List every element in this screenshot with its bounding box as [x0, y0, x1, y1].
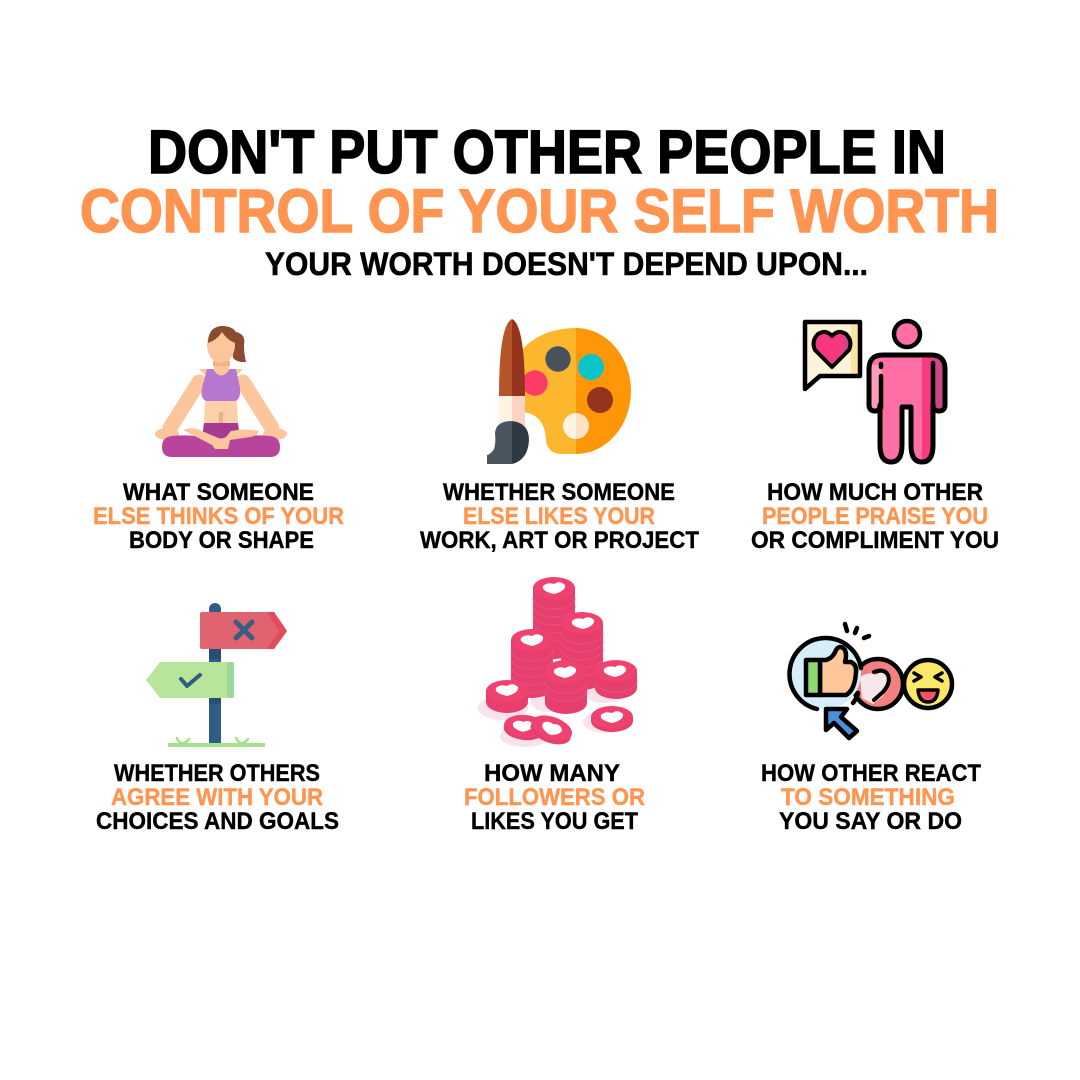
title: DON'T PUT OTHER PEOPLE IN: [148, 118, 946, 186]
title: [80, 118, 999, 245]
label: work, art or project: WHETHER SOMEONE: [443, 479, 675, 506]
label: praise or compliment: [751, 479, 999, 554]
label: body or shape: ELSE THINKS OF YOUR: [93, 503, 344, 530]
label: how others react: TO SOMETHING: [781, 784, 955, 811]
label: choices and goals: WHETHER OTHERS: [114, 760, 320, 787]
label: followers or likes: FOLLOWERS OR: [464, 784, 645, 811]
label: followers or likes: LIKES YOU GET: [471, 808, 638, 835]
label: choices and goals: CHOICES AND GOALS: [96, 808, 339, 835]
label: body or shape: BODY OR SHAPE: [129, 527, 314, 554]
label: followers or likes: [464, 760, 645, 835]
label: work, art or project: ELSE LIKES YOUR: [463, 503, 655, 530]
label: work, art or project: WORK, ART OR PROJECT: [420, 527, 699, 554]
icon: woman meditating: [155, 326, 287, 457]
label: how others react: YOU SAY OR DO: [779, 808, 962, 835]
icon: person with heart speech bubble: [805, 321, 955, 470]
label: how others react: [761, 760, 981, 835]
icon: signpost with cross and tick: [146, 603, 287, 747]
label: choices and goals: AGREE WITH YOUR: [111, 784, 323, 811]
label: work, art or project: [420, 479, 699, 554]
label: followers or likes: HOW MANY: [484, 760, 620, 787]
icon: reactions with thumbs up, heart and smiley: [789, 624, 952, 738]
icon: stacks of heart coins: [478, 577, 637, 749]
label: how others react: HOW OTHER REACT: [761, 760, 981, 787]
label: praise or compliment: HOW MUCH OTHER: [767, 479, 983, 506]
subtitle: YOUR WORTH DOESN'T DEPEND UPON...: [265, 246, 868, 282]
label: body or shape: WHAT SOMEONE: [123, 479, 314, 506]
label: body or shape: [93, 479, 344, 554]
label: praise or compliment: PEOPLE PRAISE YOU: [762, 503, 988, 530]
label: choices and goals: [96, 760, 339, 835]
title: CONTROL OF YOUR SELF WORTH: [80, 177, 999, 245]
icon: paint palette and brush: [487, 319, 631, 464]
label: praise or compliment: OR COMPLIMENT YOU: [751, 527, 999, 554]
